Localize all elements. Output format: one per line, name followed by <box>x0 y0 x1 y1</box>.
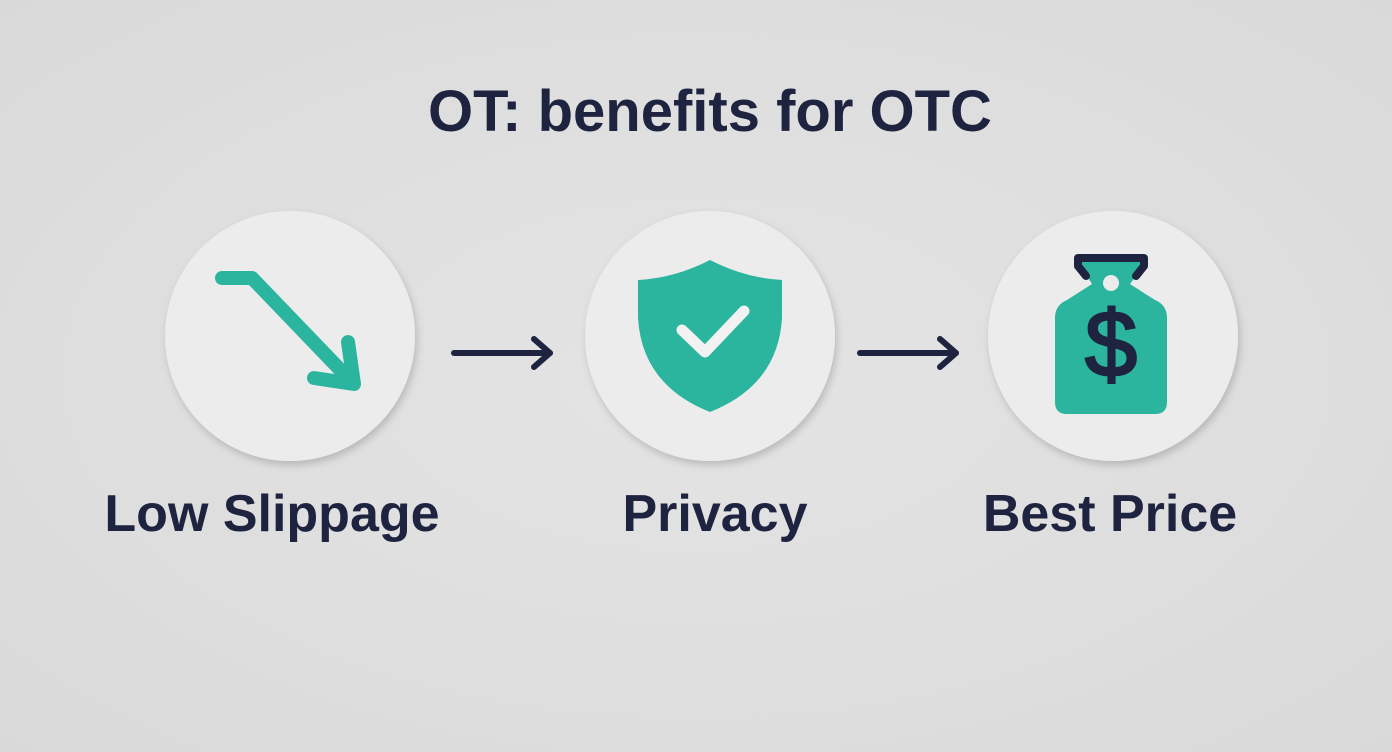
label: best price: Best Price <box>983 485 1237 543</box>
arrow 1 <box>454 339 550 367</box>
title: OT: benefits for OTC <box>428 79 992 144</box>
arrow 2 <box>860 339 956 367</box>
icon: price tag <box>1055 258 1167 414</box>
panel: low slippage circle <box>165 211 415 461</box>
icon: shield <box>638 260 782 412</box>
panel: best price circle <box>988 211 1238 461</box>
label: low slippage: Low Slippage <box>104 485 440 543</box>
icon: price tag: $ <box>1085 291 1137 396</box>
icon: down arrow <box>222 278 354 384</box>
panel: privacy circle <box>585 211 835 461</box>
label: privacy: Privacy <box>622 485 808 543</box>
